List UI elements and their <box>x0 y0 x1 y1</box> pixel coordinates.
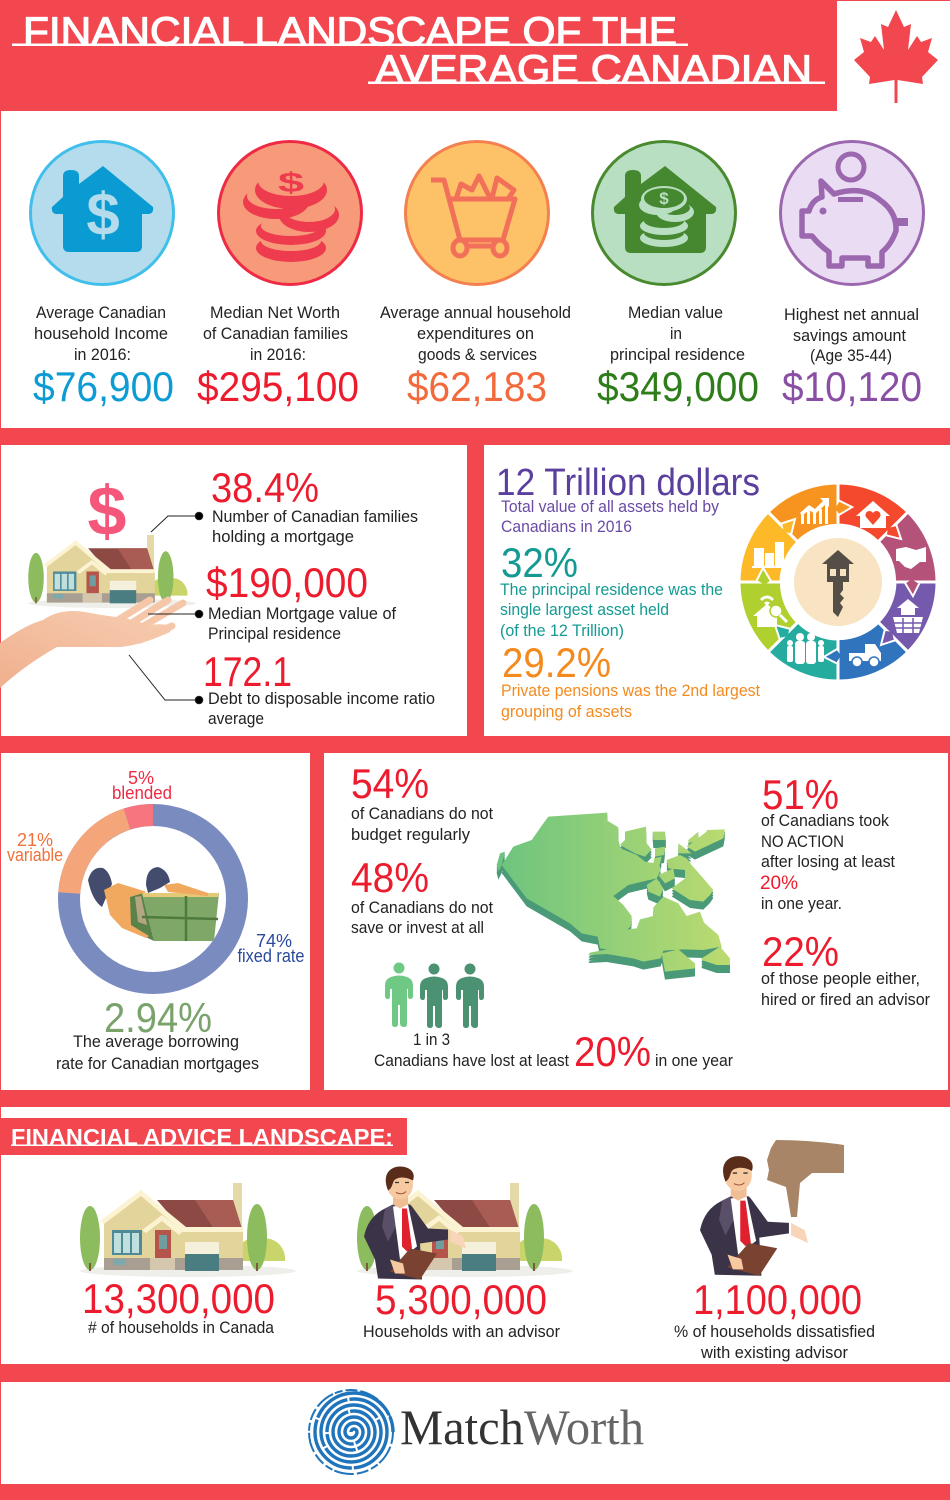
label: fixed rate <box>238 931 304 966</box>
title: FINANCIAL LANDSCAPE OF THE <box>23 10 677 54</box>
caption: expenditures: expenditures on <box>417 324 534 343</box>
title: AVERAGE CANADIAN <box>375 48 812 92</box>
icon: house with dollar <box>30 142 174 284</box>
stat: 22%: 22% <box>762 928 839 975</box>
stat: 51% <box>760 771 895 913</box>
caption: principal residence: in <box>670 324 682 343</box>
stat: dissatisfied households: 1,100,000 <box>693 1276 862 1323</box>
stat: 29.2%: grouping of assets <box>501 702 632 721</box>
icon: piggy bank <box>780 142 924 284</box>
stat: dissatisfied households: with existing advisor <box>700 1343 848 1362</box>
icon: house with coins <box>592 142 736 284</box>
stat: 48%: of Canadians do not <box>351 898 493 917</box>
stat: 172.1: 172.1 <box>203 648 292 695</box>
caption: net worth: $295,100 <box>197 363 359 410</box>
stat: 48%: 48% <box>351 854 429 901</box>
icon: house with dollar: $ <box>86 181 120 248</box>
caption: savings <box>782 305 922 410</box>
illustration: house on hand <box>0 535 196 688</box>
panel: budgeting and losses <box>351 760 930 1075</box>
stat: 29.2% <box>501 639 760 721</box>
stat: $190,000: Median Mortgage value of <box>208 604 396 623</box>
caption: household income: household Income <box>34 324 168 343</box>
stat: 22%: of those people either, <box>761 969 920 988</box>
stat: 54%: of Canadians do not <box>351 804 493 823</box>
label: fixed rate: fixed rate <box>238 946 304 966</box>
panel: assets <box>496 462 950 721</box>
stat: 48% <box>351 854 493 937</box>
stat: 1 in 3 <box>374 1028 733 1075</box>
stat: 54%: 54% <box>351 760 429 807</box>
stat: 2.94% <box>56 994 259 1073</box>
caption: net worth: of Canadian families <box>203 324 348 343</box>
caption: household income: in 2016: <box>74 345 131 364</box>
chart: mortgage type donut <box>69 815 237 983</box>
caption: savings: $10,120 <box>782 363 922 410</box>
stat: 38.4% <box>211 464 418 546</box>
stat: 32%: 32% <box>501 539 578 586</box>
map: Canada <box>497 813 730 980</box>
icon: shopping cart <box>406 142 548 284</box>
caption: savings: savings amount <box>793 326 906 345</box>
stat: 172.1 <box>203 648 435 728</box>
panel: borrowing rate <box>7 768 304 1073</box>
label: fixed rate: 74% <box>256 931 292 951</box>
illustration: advisor with house <box>357 1166 573 1280</box>
stat: $190,000 <box>206 559 396 643</box>
stat: $190,000: Principal residence <box>208 624 341 643</box>
heading: financial advice landscape <box>0 1118 407 1155</box>
stat: 29.2%: 29.2% <box>502 639 611 686</box>
stat: households in Canada: # of households in Canada <box>88 1318 275 1337</box>
stat: 38.4%: Number of Canadian families <box>212 507 418 526</box>
stat: 32%: single largest asset held <box>500 600 669 619</box>
label: blended: blended <box>112 783 172 803</box>
title <box>12 10 825 92</box>
stat: 22%: hired or fired an advisor <box>761 990 930 1009</box>
caption: expenditures: goods & services <box>418 345 537 364</box>
stat: 2.94%: 2.94% <box>104 994 212 1041</box>
stat: 38.4%: holding a mortgage <box>212 527 354 546</box>
stat: 172.1: Debt to disposable income ratio <box>208 689 435 708</box>
stat: 1 in 3: 20% <box>574 1028 651 1075</box>
heading: financial advice landscape: FINANCIAL ADVICE LANDSCAPE: <box>11 1124 393 1150</box>
stat: 32%: (of the 12 Trillion) <box>500 621 624 640</box>
stat: 2.94%: rate for Canadian mortgages <box>56 1054 259 1073</box>
illustration: house <box>80 1183 296 1277</box>
stat: 51%: 20% <box>760 873 798 894</box>
illustration: hands with money <box>88 867 219 941</box>
stat: 29.2%: Private pensions was the 2nd largest <box>501 681 760 700</box>
icon: house with coins: $ <box>659 189 669 208</box>
caption: household income <box>33 303 174 410</box>
label: variable: 21% <box>17 830 53 850</box>
label: blended <box>112 768 172 803</box>
caption: principal residence <box>597 303 759 410</box>
icon: coins <box>218 142 362 284</box>
caption: household income: Average Canadian <box>36 303 166 322</box>
caption: expenditures <box>380 303 571 410</box>
icon: maple leaf <box>854 10 938 103</box>
stat: 12 trillion <box>496 462 760 536</box>
stat: households with advisor: 5,300,000 <box>375 1276 547 1323</box>
logo: MatchWorth <box>309 1390 644 1474</box>
caption: expenditures: $62,183 <box>407 363 547 410</box>
caption: savings: (Age 35-44) <box>810 346 892 365</box>
caption: principal residence: $349,000 <box>597 363 759 410</box>
stat: 172.1: average <box>208 709 264 728</box>
stat: 54% <box>351 760 493 844</box>
caption: household income: $76,900 <box>33 363 174 410</box>
caption: principal residence: principal residence <box>610 345 745 364</box>
wordmark: MatchWorth <box>400 1399 644 1455</box>
caption: net worth: in 2016: <box>250 345 306 364</box>
caption: principal residence: Median value <box>628 303 723 322</box>
stat: 22% <box>761 928 930 1009</box>
icon: fingerprint <box>309 1390 393 1474</box>
chart: asset wheel <box>718 462 950 702</box>
caption: net worth <box>197 303 359 410</box>
stat: households with advisor <box>363 1276 560 1341</box>
stat: 54%: budget regularly <box>351 825 470 844</box>
stat: dissatisfied households: % of households dissatisfied <box>674 1322 875 1341</box>
stat row <box>30 142 924 284</box>
stat: 12 trillion: 12 Trillion dollars <box>496 462 760 504</box>
stat: 51%: of Canadians took <box>761 811 889 830</box>
stat: 1 in 3: Canadians have lost at least <box>374 1051 569 1070</box>
icon: key <box>822 550 854 617</box>
stat: 51%: in one year. <box>761 894 842 913</box>
illustration: advisor with thumb down <box>700 1140 844 1276</box>
stat: $190,000: $190,000 <box>206 559 368 606</box>
stat: 32% <box>500 539 723 640</box>
label: variable: variable <box>7 845 63 865</box>
stat: 51%: NO ACTION <box>761 832 844 851</box>
icon: dollar sign: $ <box>88 472 126 550</box>
icon: three people <box>385 962 484 1028</box>
caption: net worth: Median Net Worth <box>210 303 340 322</box>
caption: expenditures: Average annual household <box>380 303 571 322</box>
stat: 1 in 3: in one year <box>655 1051 733 1070</box>
stat: 51%: after losing at least <box>761 852 895 871</box>
stat: 2.94%: The average borrowing <box>73 1032 239 1051</box>
stat: 38.4%: 38.4% <box>211 464 319 511</box>
caption: savings: Highest net annual <box>784 305 919 324</box>
stat: dissatisfied households <box>674 1276 875 1362</box>
stat: 12 trillion: Canadians in 2016 <box>501 517 632 536</box>
label: variable <box>7 830 63 865</box>
stat: 1 in 3: 1 in 3 <box>413 1030 450 1049</box>
label: blended: 5% <box>128 768 154 788</box>
stat: households with advisor: Households with an advisor <box>363 1322 560 1341</box>
stat: 32%: The principal residence was the <box>500 580 723 599</box>
stat: 51%: 51% <box>762 771 839 818</box>
panel: mortgage <box>0 464 435 728</box>
icon: coins: $ <box>278 167 305 198</box>
stat: households in Canada: 13,300,000 <box>82 1275 275 1322</box>
stat: 12 trillion: Total value of all assets held by <box>501 497 719 516</box>
stat: 48%: save or invest at all <box>351 918 484 937</box>
connector lines <box>129 512 203 704</box>
